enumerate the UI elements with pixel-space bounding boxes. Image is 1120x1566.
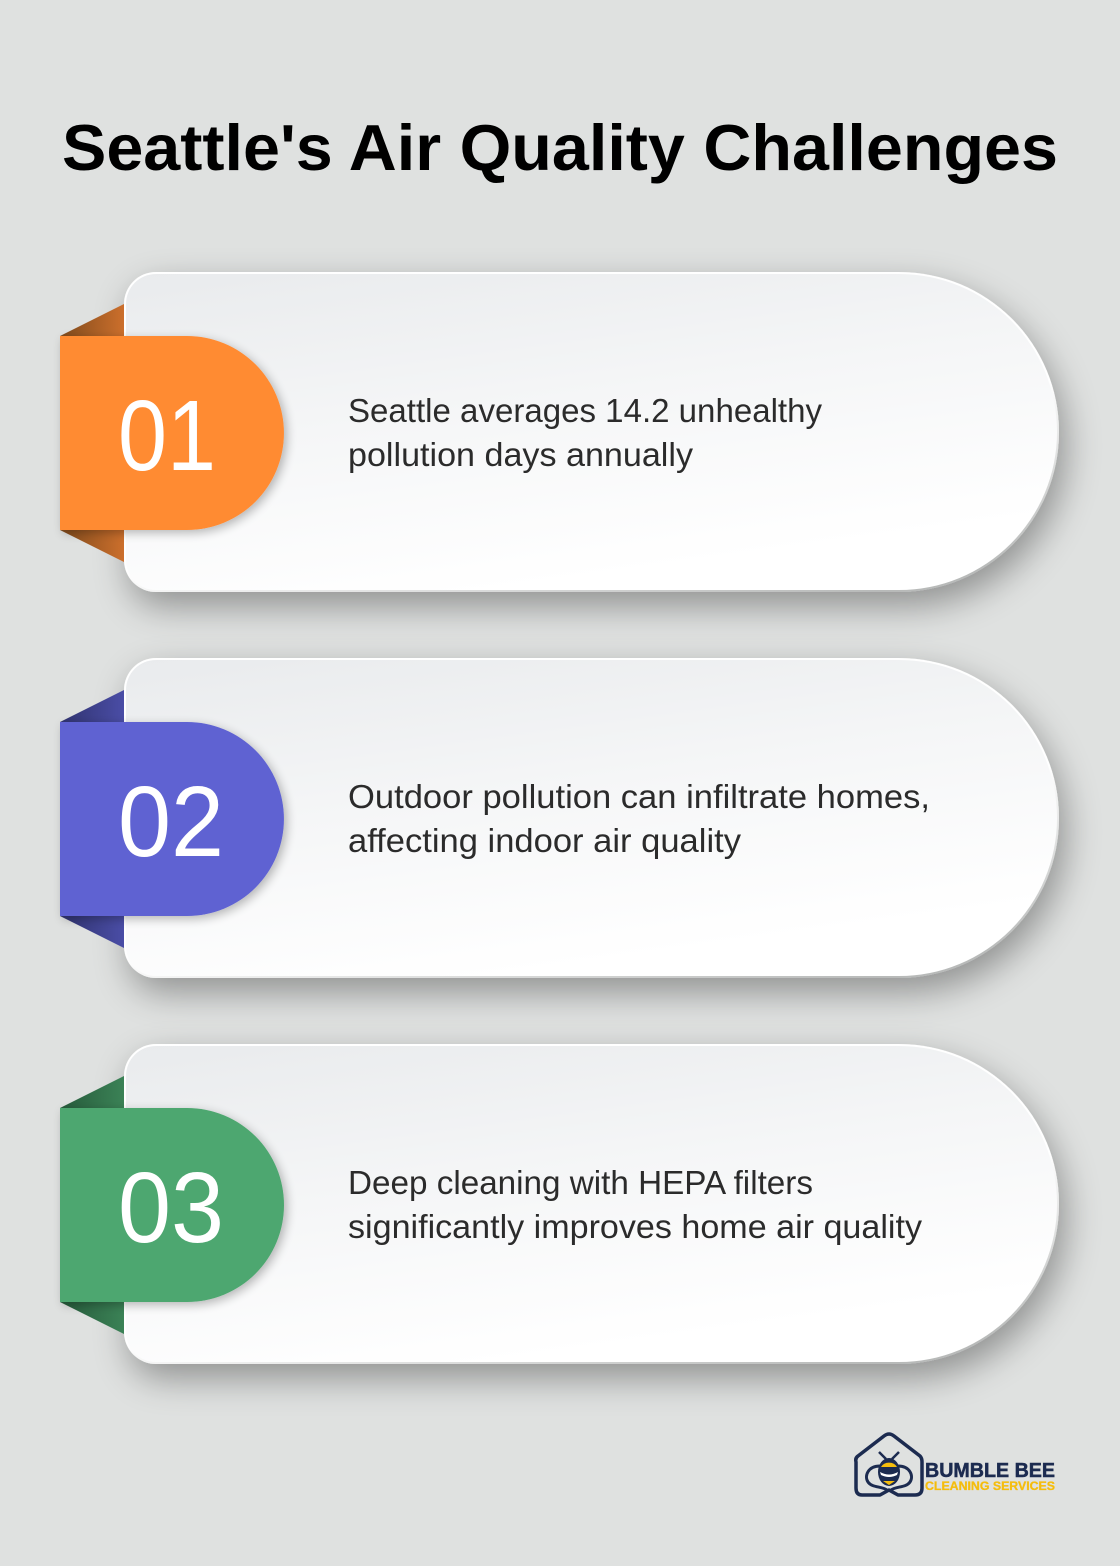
fold: upper and lower ribbon [60, 1076, 124, 1334]
text 02: Outdoor pollution can infiltrate homes, [348, 778, 930, 815]
logo wordmark: BUMBLE BEE [925, 1460, 1055, 1482]
number 03: 03 [118, 1152, 224, 1264]
logo tagline: CLEANING SERVICES [925, 1479, 1055, 1493]
fold: upper and lower ribbon [60, 690, 124, 948]
logo: Bumble Bee Cleaning Services [856, 1434, 1055, 1495]
card 03 [124, 1044, 1059, 1364]
text 03: Deep cleaning with HEPA filters [348, 1164, 813, 1201]
text 03: significantly improves home air quality [348, 1208, 923, 1245]
panel: step 01 [60, 272, 1059, 592]
panel: step 02 [60, 658, 1059, 978]
text 03 [348, 1164, 923, 1245]
fold: upper and lower ribbon [60, 304, 124, 562]
number 02: 02 [118, 766, 224, 878]
text 02: affecting indoor air quality [348, 822, 742, 859]
card 02 [124, 658, 1059, 978]
card 01 [124, 272, 1059, 592]
number 01: 01 [118, 380, 216, 492]
text 01: Seattle averages 14.2 unhealthy [348, 392, 823, 429]
badge 02 [60, 722, 284, 916]
panel: step 03 [60, 1044, 1059, 1364]
title: Seattle's Air Quality Challenges [62, 111, 1058, 184]
text 01 [348, 392, 823, 473]
icon: bee [866, 1452, 912, 1490]
icon: house outline [856, 1434, 922, 1495]
badge 01 [60, 336, 284, 530]
text 01: pollution days annually [348, 436, 694, 473]
text 02 [348, 778, 930, 859]
badge 03 [60, 1108, 284, 1302]
